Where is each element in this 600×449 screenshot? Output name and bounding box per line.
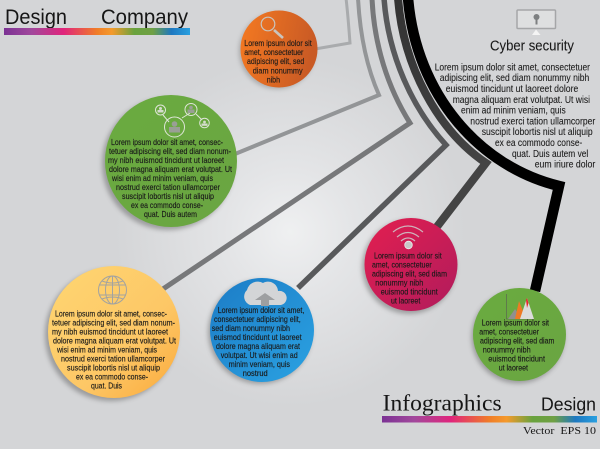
panel: yellow circle globe: dolore magna aliquam erat volutpat. Ut <box>53 336 177 346</box>
icon: people network <box>156 104 209 137</box>
icon: magnifier <box>261 17 283 38</box>
panel: orange circle <box>239 10 318 89</box>
icon: area chart <box>506 294 534 319</box>
panel: yellow circle globe <box>45 266 180 401</box>
icon: globe <box>98 276 126 304</box>
connector: yellow circle <box>163 0 410 289</box>
panel: blue circle cloud: Lorem ipsum dolor sit amet, <box>218 305 304 315</box>
panel: green circle network: ex ea commodo conse- <box>131 200 203 210</box>
header: Design Company <box>4 6 190 35</box>
panel: green circle chart: Lorem ipsum dolor sit <box>482 318 549 328</box>
panel: orange circle: nibh <box>267 75 280 85</box>
panel: green circle network: Lorem ipsum dolor sit amet, consec- <box>111 137 223 147</box>
panel: blue circle cloud: sed diam nonummy nibh <box>212 323 290 333</box>
panel: green circle chart: ut laoreet <box>499 363 528 373</box>
panel: yellow circle globe: tetuer adipiscing elit, sed diam nonum- <box>52 318 175 328</box>
panel: green circle network: wisi enim ad minim veniam, quis <box>111 173 213 183</box>
panel: pink circle wifi: Lorem ipsum dolor sit <box>374 250 442 260</box>
panel: green circle chart: amet, consectetuer <box>479 327 539 337</box>
text block: cyber security <box>435 62 596 170</box>
panel: orange circle: diam nonummy <box>253 65 303 75</box>
footer: Infographics Design <box>382 390 597 437</box>
connector: green circle <box>235 0 379 154</box>
panel: green circle chart: nonummy nibh <box>483 345 531 355</box>
connector lines <box>163 0 559 291</box>
panel: pink circle wifi <box>362 218 458 314</box>
Vector EPS 10: Vector EPS 10 <box>523 425 597 437</box>
panel: green circle network: dolore magna aliquam erat volutpat. Ut <box>109 164 233 174</box>
panel: green circle network: nostrud exerci tation ullamcorper <box>116 182 220 192</box>
panel: green circle network <box>102 95 237 230</box>
panel: orange circle: Lorem ipsum dolor sit <box>244 38 312 48</box>
panel: green circle chart: adipiscing elit, sed diam <box>480 336 554 346</box>
panel: blue circle cloud: consectetuer adipiscing elit, <box>214 314 301 324</box>
connector: orange circle <box>315 0 350 49</box>
panel: blue circle cloud <box>208 278 314 384</box>
panel: yellow circle globe: suscipit lobortis nisl ut aliquip <box>67 362 160 372</box>
icon: monitor with keyhole <box>517 10 556 35</box>
panel: pink circle wifi: nonummy nibh <box>375 277 423 287</box>
header: Design Company: Company <box>101 6 188 29</box>
panel: blue circle cloud: nostrud <box>243 368 268 378</box>
panel: orange circle: adipiscing elit, sed <box>247 56 304 66</box>
footer: Infographics Design: Infographics <box>383 390 502 416</box>
connector: black band <box>408 0 559 291</box>
connector: blue circle <box>298 0 446 288</box>
panel: green circle network: my nibh euismod tincidunt ut laoreet <box>108 155 225 165</box>
panel: yellow circle globe: quat. Duis <box>91 380 122 390</box>
connector: pink circle <box>398 0 486 228</box>
panel: blue circle cloud: dolore magna aliquam erat <box>216 341 301 351</box>
icon: wifi <box>393 226 423 249</box>
rainbow bar top <box>4 28 190 35</box>
footer: Infographics Design: Design <box>541 394 596 414</box>
panel: yellow circle globe: my nibh euismod tincidunt ut laoreet <box>52 326 169 336</box>
panel: green circle chart: euismod tincidunt <box>488 353 546 363</box>
panel: green circle network: quat. Duis autem <box>144 209 197 219</box>
panel: pink circle wifi: euismod tincidunt <box>381 286 438 296</box>
icon: cloud upload <box>244 282 287 306</box>
text block: cyber security: euismod tincidunt ut laoreet dolore <box>446 84 579 95</box>
panel: pink circle wifi: amet, consectetuer <box>372 259 432 269</box>
panel: green circle network: tetuer adipiscing elit, sed diam nonum- <box>109 146 231 156</box>
panel: blue circle cloud: euismod tincidunt ut laoreet <box>214 332 302 342</box>
header: Design Company: Design <box>5 6 67 29</box>
panel: green circle chart <box>472 288 566 384</box>
panel: orange circle: amet, consectetuer <box>244 47 303 57</box>
rainbow bar bottom <box>382 416 597 422</box>
panel: yellow circle globe: Lorem ipsum dolor sit amet, consec- <box>55 308 167 318</box>
panel: blue circle cloud: minim veniam, quis <box>229 359 290 369</box>
panel: yellow circle globe: ex ea commodo conse- <box>76 372 148 382</box>
panel: pink circle wifi: adipiscing elit, sed diam <box>372 268 447 278</box>
panel: cyber security <box>435 10 596 170</box>
heading: Cyber security: Cyber security <box>490 38 575 54</box>
text block: cyber security: ex ea commodo conse- <box>495 138 582 149</box>
panel: pink circle wifi: ut laoreet <box>391 295 421 305</box>
panel: green circle network: suscipit lobortis nisl ut aliquip <box>122 191 214 201</box>
text block: cyber security: enim ad minim veniam, quis <box>461 106 566 116</box>
panel: blue circle cloud: volutpat. Ut wisi enim ad <box>221 350 298 360</box>
panel: yellow circle globe: wisi enim ad minim veniam, quis <box>56 344 157 354</box>
panel: yellow circle globe: nostrud exerci tation ullamcorper <box>61 354 165 364</box>
